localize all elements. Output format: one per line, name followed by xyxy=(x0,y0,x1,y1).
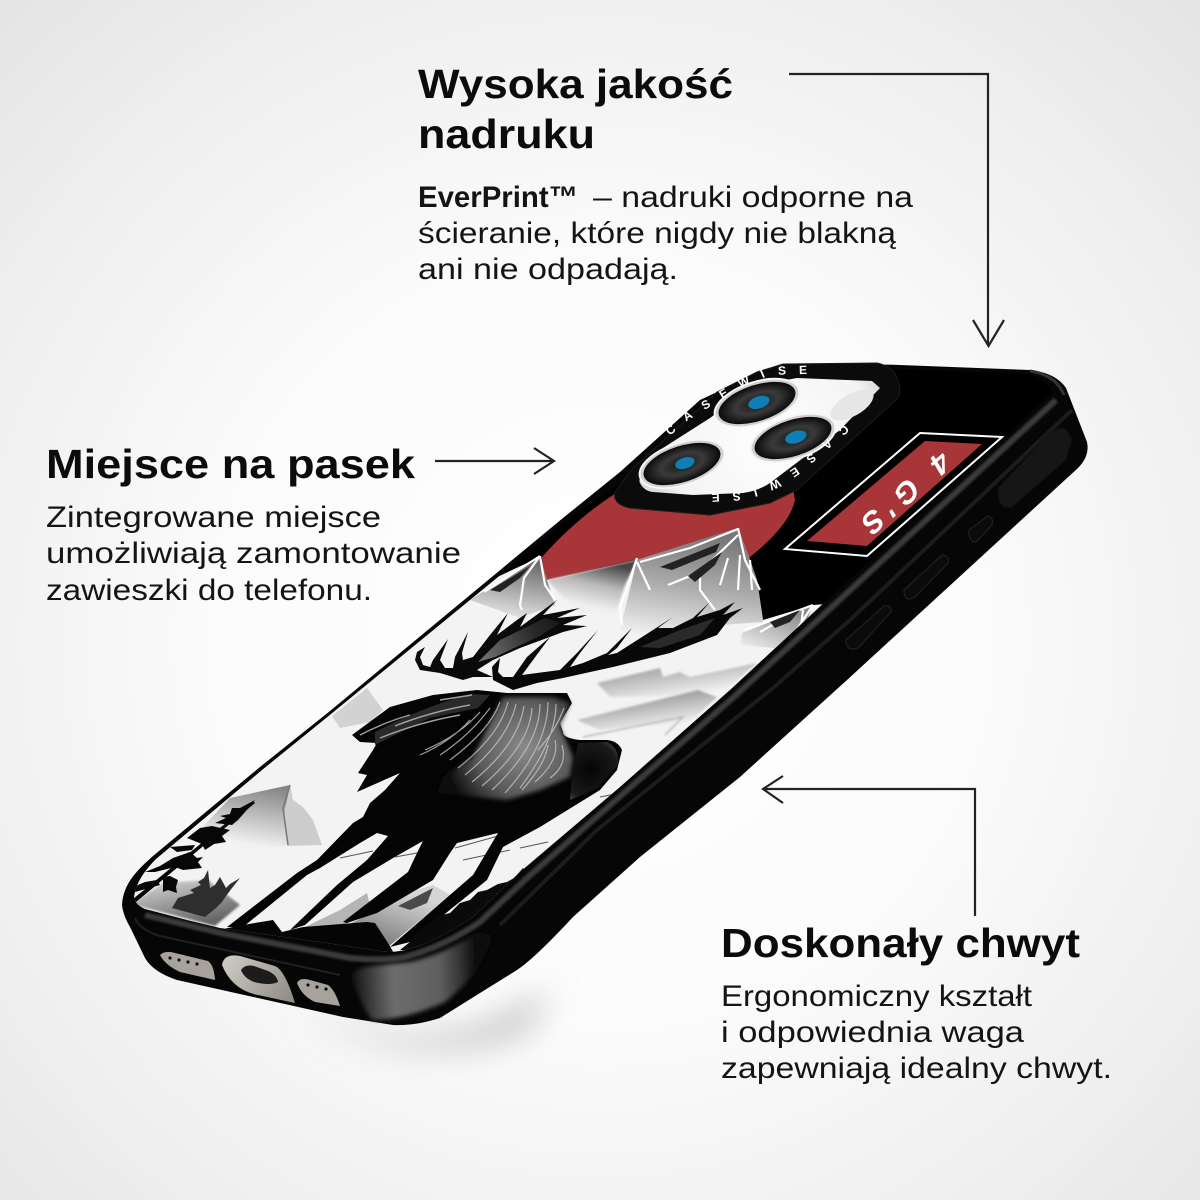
near antler palm xyxy=(478,618,560,662)
lens top xyxy=(709,369,805,437)
mountains xyxy=(470,528,813,650)
black print xyxy=(100,340,1100,980)
USB port xyxy=(222,955,295,1003)
thin fence lines xyxy=(340,794,615,860)
side rim highlight xyxy=(135,371,1072,975)
rocks xyxy=(224,920,394,952)
heading: Wysoka jakość xyxy=(418,61,733,107)
glass xyxy=(639,378,880,495)
logo plate: 4 G'S xyxy=(850,443,954,547)
heading: Miejsce na pasek xyxy=(46,441,415,487)
small peak left xyxy=(200,785,322,850)
side buttons xyxy=(846,516,992,649)
right peak xyxy=(740,607,812,648)
snow ridges xyxy=(484,528,813,640)
right speaker xyxy=(297,979,340,1006)
body text: – nadruki odporne na xyxy=(593,181,913,214)
left speaker xyxy=(160,952,215,980)
action button xyxy=(998,428,1072,507)
fur strokes xyxy=(420,702,564,793)
body text: EverPrint™ xyxy=(418,181,578,214)
callout: print quality xyxy=(418,61,913,286)
brand text: CASEWISE xyxy=(712,426,848,502)
body text: zawieszki do telefonu. xyxy=(46,574,372,607)
body text: umożliwiają zamontowanie xyxy=(46,537,461,570)
lens right xyxy=(745,404,841,472)
printed artwork xyxy=(134,492,823,952)
head highlights xyxy=(360,695,472,738)
callout: grip xyxy=(721,920,1112,1085)
lens left xyxy=(634,430,730,498)
body text: ani nie odpadają. xyxy=(418,253,678,286)
camera bump xyxy=(614,362,900,516)
moose xyxy=(227,600,743,947)
small peak upper xyxy=(332,688,383,728)
body text: i odpowiednia waga xyxy=(721,1016,1024,1049)
rump xyxy=(570,742,618,800)
body silhouette xyxy=(227,690,622,947)
logo plate xyxy=(785,433,1002,556)
body text xyxy=(418,181,913,286)
arrow: strap xyxy=(435,448,554,474)
heading: nadruku xyxy=(418,111,595,157)
body text: Zintegrowane miejsce xyxy=(46,501,381,534)
conifers left xyxy=(172,870,240,917)
phone case xyxy=(122,362,1088,1026)
arrow: grip xyxy=(763,776,975,916)
speaker holes xyxy=(168,956,328,991)
body text xyxy=(46,501,461,607)
mist left xyxy=(135,880,240,926)
trees right xyxy=(400,868,530,950)
shade between peaks xyxy=(547,560,637,615)
land xyxy=(134,528,823,952)
flash xyxy=(826,383,878,427)
red sun xyxy=(542,492,795,580)
body text: Ergonomiczny kształt xyxy=(721,980,1033,1013)
head shading xyxy=(375,694,490,745)
left peak xyxy=(470,556,555,618)
bump frame xyxy=(615,363,900,515)
mist middle xyxy=(305,885,450,947)
mane fur xyxy=(437,697,573,800)
body text: zapewniają idealny chwyt. xyxy=(721,1052,1112,1085)
trees left xyxy=(133,800,255,902)
dark crevices xyxy=(490,543,800,628)
bottom ports xyxy=(160,952,340,1006)
phone shadow xyxy=(300,990,550,1050)
brand text xyxy=(666,366,848,502)
heading xyxy=(418,61,733,157)
callout: strap xyxy=(46,441,461,607)
arrow: print quality xyxy=(789,74,1004,346)
near antler xyxy=(415,600,587,680)
far antler palm xyxy=(640,618,715,648)
body text: ścieranie, które nigdy nie blakną xyxy=(418,217,896,250)
centre peak xyxy=(621,528,763,631)
case body xyxy=(122,363,1088,1025)
corner sheen xyxy=(352,932,492,1020)
brand text: CASEWISE xyxy=(666,366,807,434)
distant ridges xyxy=(577,663,757,737)
heading: Doskonały chwyt xyxy=(721,920,1080,966)
body text xyxy=(721,980,1112,1085)
far antler xyxy=(492,602,743,690)
